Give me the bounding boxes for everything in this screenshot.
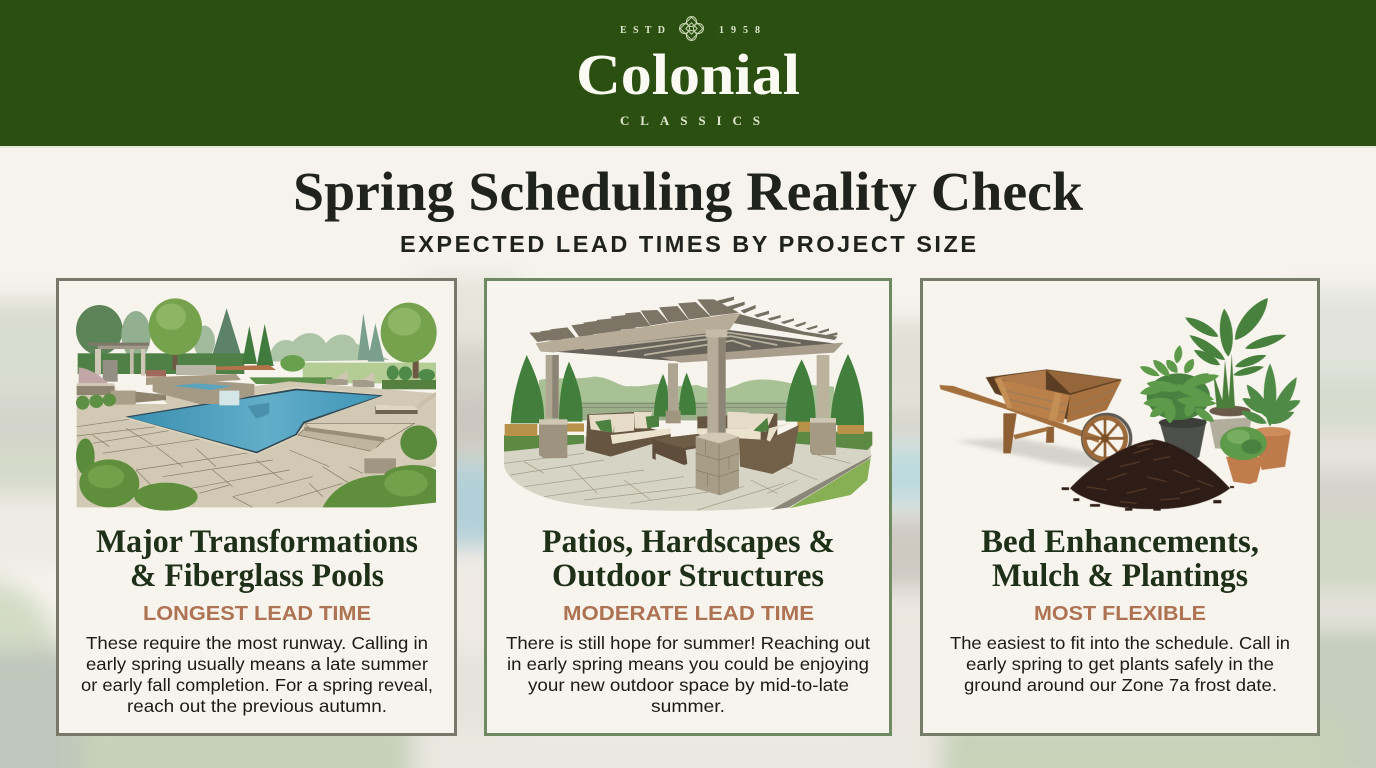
potted plants	[1139, 293, 1303, 484]
card body text: early spring to get plants safely in the	[966, 654, 1274, 674]
card heading: Major Transformations	[96, 524, 418, 560]
card label: MODERATE LEAD TIME	[563, 603, 814, 625]
card body text: your new outdoor space by mid-to-late	[528, 675, 849, 695]
logo wordmark: Colonial	[576, 42, 800, 107]
logo subtitle: CLASSICS	[620, 113, 760, 128]
header band	[0, 0, 1376, 148]
main title: Spring Scheduling Reality Check	[293, 161, 1083, 222]
illustration: wheelbarrow, mulch and plants	[939, 293, 1303, 511]
card body text	[950, 633, 1290, 695]
panel: patios and hardscapes	[486, 280, 890, 734]
card heading: Patios, Hardscapes &	[542, 524, 835, 560]
card heading: & Fiberglass Pools	[130, 558, 384, 594]
card body text: summer.	[651, 696, 725, 716]
card body text: ground around our Zone 7a frost date.	[964, 675, 1277, 695]
header text: 1958: 1958	[719, 25, 760, 36]
card body text: These require the most runway. Calling in	[86, 633, 428, 653]
header text: ESTD: ESTD	[620, 25, 665, 36]
card label: MOST FLEXIBLE	[1034, 603, 1206, 625]
card body text: or early fall completion. For a spring reveal,	[81, 675, 433, 695]
card body text	[81, 633, 433, 716]
card body text: early spring usually means a late summer	[86, 654, 428, 674]
card body text: There is still hope for summer! Reaching out	[506, 633, 870, 653]
card body text	[506, 633, 870, 716]
panel: bed enhancements	[922, 280, 1318, 734]
card heading: Outdoor Structures	[552, 558, 824, 594]
illustration: pergola	[504, 297, 872, 511]
illustration: pool	[76, 298, 437, 511]
wheelbarrow	[939, 369, 1131, 462]
card body text: reach out the previous autumn.	[127, 696, 387, 716]
icon: rosette emblem	[680, 16, 704, 40]
card heading	[981, 524, 1259, 594]
card heading: Mulch & Plantings	[992, 558, 1248, 594]
mulch pile	[1062, 439, 1234, 511]
main subtitle: EXPECTED LEAD TIMES BY PROJECT SIZE	[400, 231, 976, 257]
shadow under wheelbarrow	[955, 438, 1097, 470]
card heading: Bed Enhancements,	[981, 524, 1259, 560]
card label: LONGEST LEAD TIME	[143, 603, 371, 625]
card body text: in early spring means you could be enjoying	[507, 654, 869, 674]
card body text: The easiest to fit into the schedule. Call in	[950, 633, 1290, 653]
card heading	[96, 524, 418, 594]
panel: major transformations	[58, 280, 456, 734]
card heading	[542, 524, 835, 594]
